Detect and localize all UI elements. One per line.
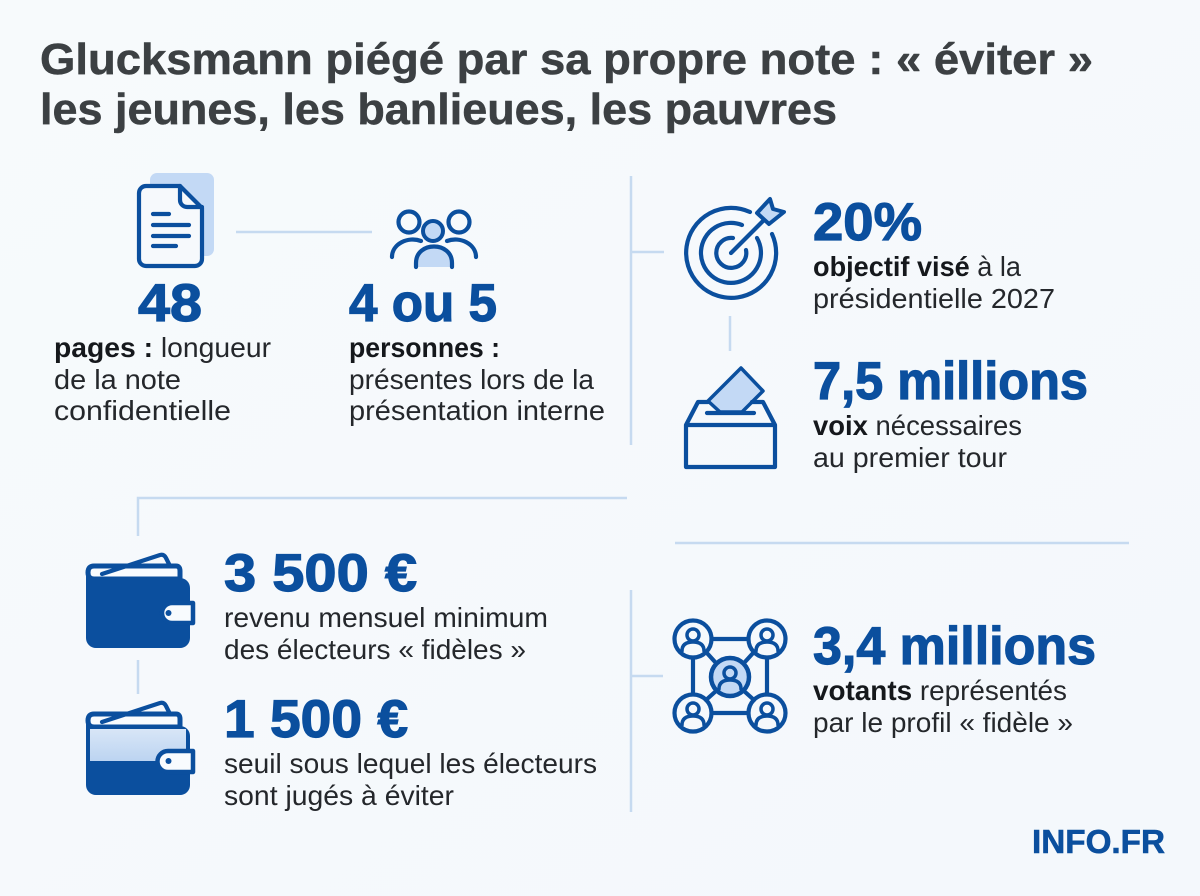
stat: 3 500 euros: 3 500 €: [224, 544, 417, 603]
icon: half-empty wallet: [86, 703, 193, 795]
panel: 1 500 euros: [86, 690, 597, 811]
description: seuil: sont jugés à éviter: [224, 780, 454, 811]
description: revenu minimum: [224, 602, 548, 665]
panel: 4 ou 5 personnes: [349, 212, 605, 426]
description: pages: confidentielle: [54, 395, 231, 426]
description: votants: [813, 675, 1073, 738]
description: voix: voix nécessaires: [813, 410, 1022, 441]
panel: 7,5 millions: [686, 352, 1088, 473]
icon: people: [392, 212, 476, 267]
description: objectif: objectif visé à la: [813, 251, 1021, 282]
description: revenu minimum: des électeurs « fidèles »: [224, 634, 526, 665]
title: [40, 35, 1093, 134]
description: personnes: personnes :: [349, 332, 500, 363]
description: objectif: [813, 251, 1055, 314]
description: voix: [813, 410, 1022, 473]
brand logo: INFO.FR: [1032, 823, 1165, 860]
description: votants: votants représentés: [813, 675, 1067, 706]
stat: 3,4 millions: 3,4 millions: [813, 617, 1096, 676]
icon: document: [139, 173, 214, 266]
description: personnes: présentes lors de la: [349, 364, 594, 395]
description: personnes: présentation interne: [349, 395, 605, 426]
description: seuil: seuil sous lequel les électeurs: [224, 748, 597, 779]
description: votants: par le profil « fidèle »: [813, 707, 1073, 738]
description: personnes: [349, 332, 605, 426]
title: les jeunes, les banlieues, les pauvres: [40, 85, 837, 134]
stat: 48: 48: [138, 274, 202, 333]
panel: 3,4 millions: [674, 617, 1096, 738]
icon: voter network: [674, 620, 786, 732]
icon: full wallet: [86, 555, 193, 648]
stat: 7,5 millions: 7,5 millions: [813, 352, 1088, 411]
stat: 20%: 20%: [813, 193, 922, 252]
title: Glucksmann piégé par sa propre note : « éviter »: [40, 35, 1093, 84]
description: revenu minimum: revenu mensuel minimum: [224, 602, 548, 633]
panel: 3 500 euros: [86, 544, 548, 665]
description: voix: au premier tour: [813, 442, 1007, 473]
description: objectif: présidentielle 2027: [813, 283, 1055, 314]
icon: target with arrow: [686, 199, 784, 298]
description: pages: pages : longueur: [54, 332, 271, 363]
description: pages: de la note: [54, 364, 181, 395]
description: seuil: [224, 748, 597, 811]
description: pages: [54, 332, 271, 426]
stat: 4 ou 5: 4 ou 5: [349, 274, 497, 333]
icon: ballot box: [686, 368, 775, 467]
panel: objectif 20%: [686, 193, 1055, 314]
panel: 48 pages: [54, 173, 271, 426]
stat: 1 500 euros: 1 500 €: [224, 690, 408, 749]
